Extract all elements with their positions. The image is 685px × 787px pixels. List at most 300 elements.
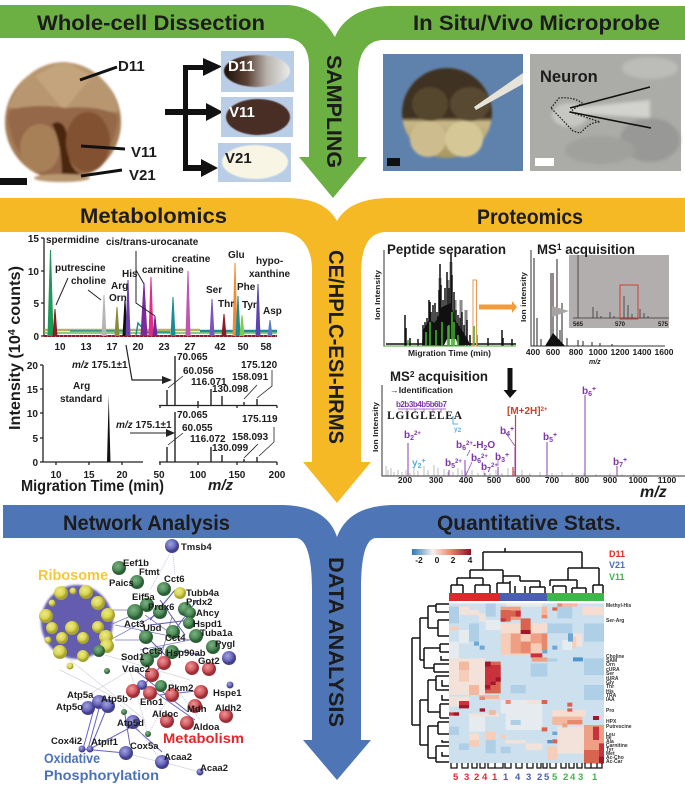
- sample numbers: 3: [464, 772, 469, 783]
- sample numbers: 2: [563, 772, 568, 783]
- peak labels: cis/trans-urocanate: [106, 237, 199, 248]
- protein labels: Prdx6: [148, 602, 174, 613]
- protein labels: Tmsb4: [181, 542, 212, 553]
- peak labels: Glu: [228, 250, 245, 261]
- metabolite labels: tURA: [606, 676, 619, 682]
- chart: MS1 acquisition: Ion intensity: [519, 271, 528, 322]
- panel: D11 cell photo: D11: [228, 58, 255, 75]
- chart: MS2 acquisition: m/z: [640, 484, 667, 501]
- protein labels: Atp5o: [56, 702, 83, 713]
- axis title: migration time: Migration Time (min): [21, 478, 164, 495]
- x tick labels: 200: [398, 475, 412, 485]
- chart: MS2 acquisition: b: [404, 430, 410, 441]
- protein labels: Hsp90ab: [166, 648, 206, 659]
- title: 2: [410, 369, 415, 379]
- yellow analysis banner arrow: [0, 198, 685, 503]
- scale bar: [387, 158, 400, 166]
- metabolite labels: Orn: [606, 662, 615, 668]
- x tick labels: 20: [132, 342, 144, 353]
- black trace: [386, 253, 516, 346]
- chart: MS2 acquisition: 2: [418, 463, 422, 470]
- arrowhead: sample spectrum: [162, 376, 172, 384]
- heading: whole-cell dissection: Whole-cell Dissection: [37, 12, 265, 35]
- chart: MS2 acquisition: b: [471, 453, 477, 464]
- color legend: 2: [451, 555, 456, 565]
- x tick labels: 27: [184, 342, 196, 353]
- x tick labels: 13: [80, 342, 92, 353]
- chart: MS1 acquisition: [519, 241, 674, 366]
- chart: MS2 acquisition: 2+: [481, 454, 488, 460]
- chart: MS2 spectrum sample: 70.065: [177, 352, 208, 363]
- chart: MS2 acquisition: 6: [462, 445, 466, 452]
- protein labels: Mdh: [187, 704, 207, 715]
- metabolite labels: Methyl-His: [606, 603, 632, 609]
- callout: D11 on embryo: [80, 58, 145, 80]
- purple peaks: [408, 395, 617, 476]
- chart: metabolite electropherogram: 5: [33, 299, 39, 310]
- protein labels: Ahcy: [196, 608, 220, 619]
- chart: protein network: [38, 539, 244, 783]
- chart: MS2 spectrum standard: 60.055: [182, 423, 213, 434]
- panel: microprobe embryo photo: [383, 54, 523, 171]
- metabolite labels: His: [606, 689, 614, 695]
- inset spectrum: 565: [573, 322, 584, 328]
- sample numbers: 2: [474, 772, 479, 783]
- chart: MS1 acquisition: 1200: [611, 347, 630, 357]
- chart: peptide separation: Ion Intensity: [373, 269, 382, 320]
- chart: MS2 acquisition: 700: [545, 475, 559, 485]
- metabolite labels: Ala: [606, 739, 614, 745]
- chart: MS1 acquisition: 400: [526, 347, 540, 357]
- peak labels: creatine: [172, 254, 211, 265]
- protein labels: Aldoa: [193, 722, 220, 733]
- chart: peptide separation: Migration Time (min): [408, 349, 491, 358]
- heading: quantitative stats: Quantitative Stats.: [437, 512, 621, 535]
- chart: MS2 acquisition: O: [487, 440, 495, 451]
- x tick labels: 10: [54, 342, 66, 353]
- sample numbers: 4: [515, 772, 521, 783]
- chart: MS2 acquisition: +: [623, 457, 627, 464]
- axes: [41, 238, 277, 336]
- leader lines: [56, 251, 155, 316]
- protein labels: Ftmt: [139, 567, 160, 578]
- chart: MS2 spectrum sample: 60.056: [183, 366, 214, 377]
- sample numbers: 1: [503, 772, 509, 783]
- top dendrogram: [451, 548, 603, 593]
- panel: V11 cell photo: V11: [229, 104, 255, 121]
- protein labels: Atpif1: [91, 737, 119, 748]
- protein labels: Pygl: [215, 639, 235, 650]
- color legend: -2: [415, 555, 423, 565]
- title: 1: [557, 242, 562, 252]
- chart: MS2 acquisition: 900: [603, 475, 617, 485]
- callout: V21 on embryo: [81, 167, 156, 184]
- group color bar: [449, 593, 604, 601]
- protein labels: Act3: [124, 619, 145, 630]
- chart: MS2 acquisition: b: [456, 440, 462, 451]
- protein labels: Eef1b: [123, 558, 149, 569]
- sequence annotation: 2: [458, 427, 462, 434]
- sample numbers: 1: [592, 772, 598, 783]
- protein labels: Hspd1: [193, 619, 223, 630]
- chart: MS1 acquisition: 1600: [655, 347, 674, 357]
- chart: Arg standard electropherogram: 15: [27, 385, 38, 396]
- chart: MS2 acquisition: 500: [487, 475, 501, 485]
- protein labels: Cct3: [142, 646, 163, 657]
- heatmap: [412, 548, 632, 783]
- x tick labels: 42: [214, 342, 226, 353]
- peaks: [48, 250, 53, 336]
- chart: MS2 acquisition: 600: [516, 475, 530, 485]
- protein labels: Tuba1a: [200, 628, 233, 639]
- chart: MS1 acquisition: 1400: [633, 347, 652, 357]
- chart: MS2 spectrum sample: 175.120: [241, 360, 278, 371]
- chart: Arg standard electropherogram: 15: [83, 470, 95, 481]
- chart: MS2 acquisition: y: [412, 458, 418, 469]
- chart: MS2 acquisition: 7: [487, 467, 491, 474]
- label: ribosome: Ribosome: [38, 568, 108, 584]
- chart: MS2 acquisition: 800: [575, 475, 589, 485]
- chart: MS2 spectrum sample: 116.071: [191, 377, 227, 388]
- chart: metabolite electropherogram: 10: [28, 267, 39, 278]
- sample numbers: 3: [578, 772, 583, 783]
- chart: MS2 acquisition: 1000: [629, 475, 648, 485]
- metabolite labels: Gly: [606, 680, 614, 686]
- y axis title: intensity: Intensity (10: [7, 340, 24, 430]
- chart: MS2 spectrum sample: [72, 352, 278, 408]
- scale bar: [0, 178, 27, 185]
- chart: MS2 acquisition: 6: [477, 458, 481, 465]
- blue oxidative phosphorylation nodes: [78, 539, 236, 776]
- protein labels: [51, 542, 242, 774]
- arrow: electropherogram to sample spectrum: [126, 345, 165, 380]
- sequence annotation: LGIGLELEA: [387, 410, 463, 422]
- chart: MS2 spectrum standard: 158.093: [232, 432, 269, 443]
- chart: MS2 spectrum standard: 150: [229, 470, 246, 481]
- sample numbers: 4: [570, 772, 576, 783]
- sample numbers: [453, 772, 598, 783]
- chart: MS2 acquisition: 5: [549, 437, 553, 444]
- chart: MS2 acquisition: b: [613, 457, 619, 468]
- protein labels: Acaa2: [164, 752, 192, 763]
- chart: MS2 acquisition: +: [421, 458, 426, 465]
- sample numbers: 5: [453, 772, 459, 783]
- protein labels: Atp5b: [101, 694, 128, 705]
- panel: V11 cell photo: [221, 97, 293, 137]
- sample numbers: 2: [537, 772, 542, 783]
- vertical label: CE/HPLC-ESI-HRMS: CE/HPLC-ESI-HRMS: [324, 250, 347, 444]
- protein labels: Prdx2: [186, 597, 212, 608]
- chart: Arg standard electropherogram: Arg: [73, 381, 90, 392]
- gray trace: [440, 262, 466, 345]
- x tick labels: 50: [237, 342, 249, 353]
- sample numbers: 5: [552, 772, 558, 783]
- title: MS: [537, 241, 558, 257]
- arrow: branching to dissected cells: [165, 58, 223, 177]
- chart: MS2 spectrum standard: 200: [269, 470, 286, 481]
- chart: MS2 acquisition: Ion Intensity: [371, 401, 380, 452]
- blue data analysis banner arrow: [3, 505, 685, 780]
- chart: MS2 spectrum standard: 175.119: [242, 414, 278, 425]
- chart: MS2 acquisition: 2+: [491, 463, 498, 469]
- peak labels: putrescine: [55, 263, 106, 274]
- chart: MS2 acquisition: 6: [588, 391, 592, 398]
- group legend: D11: [609, 549, 625, 559]
- peak labels: Tyr: [242, 300, 257, 311]
- red metabolism nodes: [126, 656, 233, 730]
- chart: MS2 acquisition: b: [500, 426, 506, 437]
- protein labels: Pkm2: [168, 683, 193, 694]
- group legend: [609, 549, 625, 582]
- baselines: [44, 329, 200, 331]
- chart: MS1 acquisition: m/z: [589, 359, 601, 366]
- metabolite labels: Carnitine: [606, 743, 628, 749]
- metabolite labels: Tyr: [606, 747, 613, 753]
- chart: MS2 spectrum standard: m/z 175.1±1: [116, 420, 172, 431]
- yellow ribosome nodes: [39, 585, 186, 670]
- noise: [386, 465, 650, 476]
- chart: Arg standard electropherogram: [27, 361, 143, 481]
- black envelope: [422, 303, 470, 345]
- protein labels: Got2: [198, 656, 220, 667]
- peak labels: hypo-: [256, 256, 283, 267]
- chart: MS2 acquisition: 2: [410, 435, 414, 442]
- chart: MS2 acquisition: [371, 369, 685, 501]
- title: acquisition: [414, 369, 488, 384]
- inset spectrum: [569, 255, 669, 328]
- metabolite labels: Leu: [606, 732, 615, 738]
- group legend: V11: [609, 572, 625, 582]
- metabolite labels: Putrescine: [606, 724, 632, 730]
- chart: MS2 spectrum standard: 70.065: [177, 410, 208, 421]
- sample numbers: 3: [526, 772, 531, 783]
- vertical label: sampling: SAMPLING: [322, 55, 345, 168]
- chart: MS2 spectrum standard: 100: [190, 470, 207, 481]
- chart: MS2 acquisition: +: [510, 426, 514, 433]
- peak labels: [46, 235, 291, 317]
- orange selection box: [473, 280, 476, 346]
- protein labels: Paics: [109, 578, 134, 589]
- protein labels: Eno1: [140, 697, 164, 708]
- y axis title: intensity: 4: [7, 329, 18, 335]
- metabolite labels: Ser-Arg: [606, 618, 624, 624]
- precursor peak: [513, 415, 516, 476]
- chart: Arg standard electropherogram: 10: [27, 409, 38, 420]
- protein labels: Cct6: [164, 574, 185, 585]
- chart: MS2 acquisition: b: [495, 452, 501, 463]
- embryo body: [5, 62, 121, 182]
- protein labels: Ubd: [143, 623, 162, 634]
- inset spectrum: 575: [658, 322, 669, 328]
- panel: D11 cell photo: [221, 51, 294, 92]
- chart: MS2 acquisition: b: [445, 458, 451, 469]
- chart: MS2 acquisition: 5: [451, 463, 455, 470]
- chart: MS2 acquisition: 2+: [466, 441, 473, 447]
- heading: in situ microprobe: In Situ/Vivo Microprobe: [413, 12, 660, 35]
- chart: MS2 acquisition: +: [505, 452, 509, 459]
- chart: Arg standard electropherogram: 20: [116, 470, 128, 481]
- arrow: standard to spectrum: [130, 429, 175, 437]
- metabolite labels: Ser: [606, 671, 614, 677]
- white gaps: [444, 339, 458, 345]
- protein labels: Vdac2: [122, 664, 150, 675]
- sample numbers: 1: [492, 772, 498, 783]
- sequence annotation: b2b3b4b5b6b7: [396, 400, 448, 409]
- protein labels: Cox4i2: [51, 736, 82, 747]
- zoom wedge: [552, 306, 569, 317]
- pipette lines: [570, 87, 651, 128]
- green nodes: [93, 561, 220, 737]
- panel: V21 cell photo: V21: [225, 150, 252, 167]
- protein labels: Sod1: [121, 652, 145, 663]
- protein labels: Atp5a: [67, 690, 94, 701]
- chart: metabolite electropherogram: 0: [33, 332, 39, 343]
- peak labels: Orn: [109, 293, 127, 304]
- chart: MS2 acquisition: 2: [483, 445, 487, 452]
- chart: Arg standard electropherogram: 0: [32, 458, 38, 469]
- chart: MS1 acquisition: 800: [569, 347, 583, 357]
- chart: MS2 acquisition: b: [481, 462, 487, 473]
- chart: MS2 acquisition: 1100: [658, 475, 676, 485]
- protein labels: Atp5d: [117, 718, 144, 729]
- metabolite labels: Ile: [606, 735, 612, 741]
- chart: MS2 spectrum sample: 158.091: [232, 372, 269, 383]
- x tick labels: 58: [260, 342, 272, 353]
- protein labels: Cox5a: [130, 741, 159, 752]
- title: MS: [390, 369, 410, 384]
- metabolite labels: TRA: [606, 693, 617, 699]
- panel: neuron photo: [530, 54, 681, 171]
- chart: MS2 acquisition: -H: [473, 440, 483, 451]
- protein labels: Cct4: [165, 633, 186, 644]
- fragment labels: 2+: [541, 407, 548, 413]
- callout: V11 on embryo: V11: [131, 144, 157, 161]
- green sampling banner arrow: [0, 5, 685, 198]
- metabolite labels: Pro: [606, 708, 614, 714]
- chart: MS1 acquisition: 600: [546, 347, 560, 357]
- label: oxidative phosphorylation: Oxidative: [44, 750, 100, 766]
- x tick labels: 23: [158, 342, 170, 353]
- protein labels: Aldh2: [215, 703, 241, 714]
- chart: MS2 spectrum sample: 130.098: [212, 384, 249, 395]
- metabolite labels: Ac-Car: [606, 759, 622, 765]
- chart: MS1 acquisition: 1000: [589, 347, 608, 357]
- callout: V11 on embryo: [81, 144, 157, 161]
- chart: peptide separation: [373, 241, 516, 358]
- callout: V21 on embryo: V21: [129, 167, 156, 184]
- fragment labels: [M+2H]: [507, 406, 541, 417]
- pipette: [474, 73, 523, 110]
- label: oxidative phosphorylation: Phosphorylation: [44, 767, 159, 783]
- chart: MS2 acquisition: b: [543, 432, 549, 443]
- chart: MS2 acquisition: 3: [501, 457, 505, 464]
- chart: MS2 spectrum standard: [116, 410, 286, 481]
- chart: Arg standard electropherogram: 5: [32, 434, 38, 445]
- neuron outline: [551, 98, 600, 133]
- x tick labels: 17: [106, 342, 118, 353]
- metabolite labels: Thr: [606, 684, 614, 690]
- sequence annotation: [387, 400, 463, 434]
- chart: MS2 spectrum sample: m/z 175.1±1: [72, 360, 128, 371]
- bottom sample brackets: [451, 763, 602, 768]
- metabolite labels: IAA: [606, 697, 615, 703]
- left dendrogram: [412, 604, 449, 762]
- chart: Arg standard electropherogram: 10: [50, 470, 62, 481]
- metabolite labels: [606, 603, 632, 765]
- axis title: m/z: m/z: [208, 477, 234, 494]
- sample numbers: 5: [544, 772, 550, 783]
- heading: proteomics: Proteomics: [477, 206, 583, 229]
- sequence annotation: y: [454, 426, 458, 433]
- chart: MS2 acquisition: 300: [429, 475, 443, 485]
- protein labels: Aldoc: [152, 709, 178, 720]
- protein labels: Eif5a: [132, 592, 155, 603]
- heading: metabolomics: Metabolomics: [80, 205, 227, 228]
- chart: MS2 spectrum standard: 116.072: [190, 434, 226, 445]
- protein labels: Tubb4a: [186, 588, 220, 599]
- chart: Arg standard electropherogram: standard: [60, 394, 102, 405]
- chart: MS2 acquisition: 7: [619, 462, 623, 469]
- title: acquisition: [562, 241, 635, 257]
- chart: Arg standard electropherogram: 20: [27, 361, 38, 372]
- inset spectrum: 570: [615, 322, 626, 328]
- protein labels: Acaa2: [200, 763, 228, 774]
- color legend: [412, 549, 473, 565]
- protein labels: Hspe1: [213, 688, 242, 699]
- metabolite labels: HPX: [606, 719, 617, 725]
- y axis title: intensity: counts): [7, 266, 24, 329]
- label: metabolism: Metabolism: [163, 730, 244, 746]
- green trace: [408, 312, 477, 346]
- chart: MS2 acquisition: +: [592, 386, 596, 393]
- heading: network analysis: Network Analysis: [63, 512, 230, 535]
- metabolite labels: cURA: [606, 667, 620, 673]
- chart: MS2 acquisition: +: [553, 432, 557, 439]
- metabolite labels: Ac-Cho: [606, 755, 624, 761]
- heatmap cells: [449, 603, 604, 763]
- label: neuron: Neuron: [540, 68, 598, 86]
- chart: MS2 acquisition: 2+: [455, 459, 462, 465]
- panel: whole embryo photo: [0, 62, 121, 185]
- chart: MS2 spectrum standard: 130.099: [212, 443, 249, 454]
- peak labels: choline: [71, 276, 106, 287]
- peak labels: Arg: [111, 281, 128, 292]
- scale bar: [535, 158, 554, 166]
- callout: D11 on embryo: D11: [118, 58, 145, 75]
- x tick labels: [54, 342, 272, 353]
- title: Peptide separation: [387, 241, 506, 257]
- y tick labels: 15: [28, 234, 39, 245]
- peak labels: carnitine: [142, 265, 184, 276]
- metabolite labels: SAM: [606, 658, 617, 664]
- group legend: V21: [609, 560, 625, 570]
- metabolite labels: Met: [606, 751, 615, 757]
- network edges: [41, 545, 205, 772]
- chart: MS2 spectrum standard: 50: [153, 470, 165, 481]
- color legend: 4: [468, 555, 473, 565]
- color legend: 0: [435, 555, 440, 565]
- chart: MS2 acquisition: b: [582, 386, 588, 397]
- peak labels: xanthine: [249, 269, 291, 280]
- peak labels: Ser: [206, 285, 222, 296]
- chart: MS2 acquisition: →Identification: [390, 386, 453, 395]
- panel: V21 cell photo: [218, 143, 291, 182]
- peak labels: Phe: [237, 282, 256, 293]
- metabolite labels: Choline: [606, 654, 625, 660]
- sample numbers: 4: [482, 772, 488, 783]
- arrow: MS1 to MS2: [504, 368, 517, 398]
- label: oxidative phosphorylation: [44, 750, 159, 783]
